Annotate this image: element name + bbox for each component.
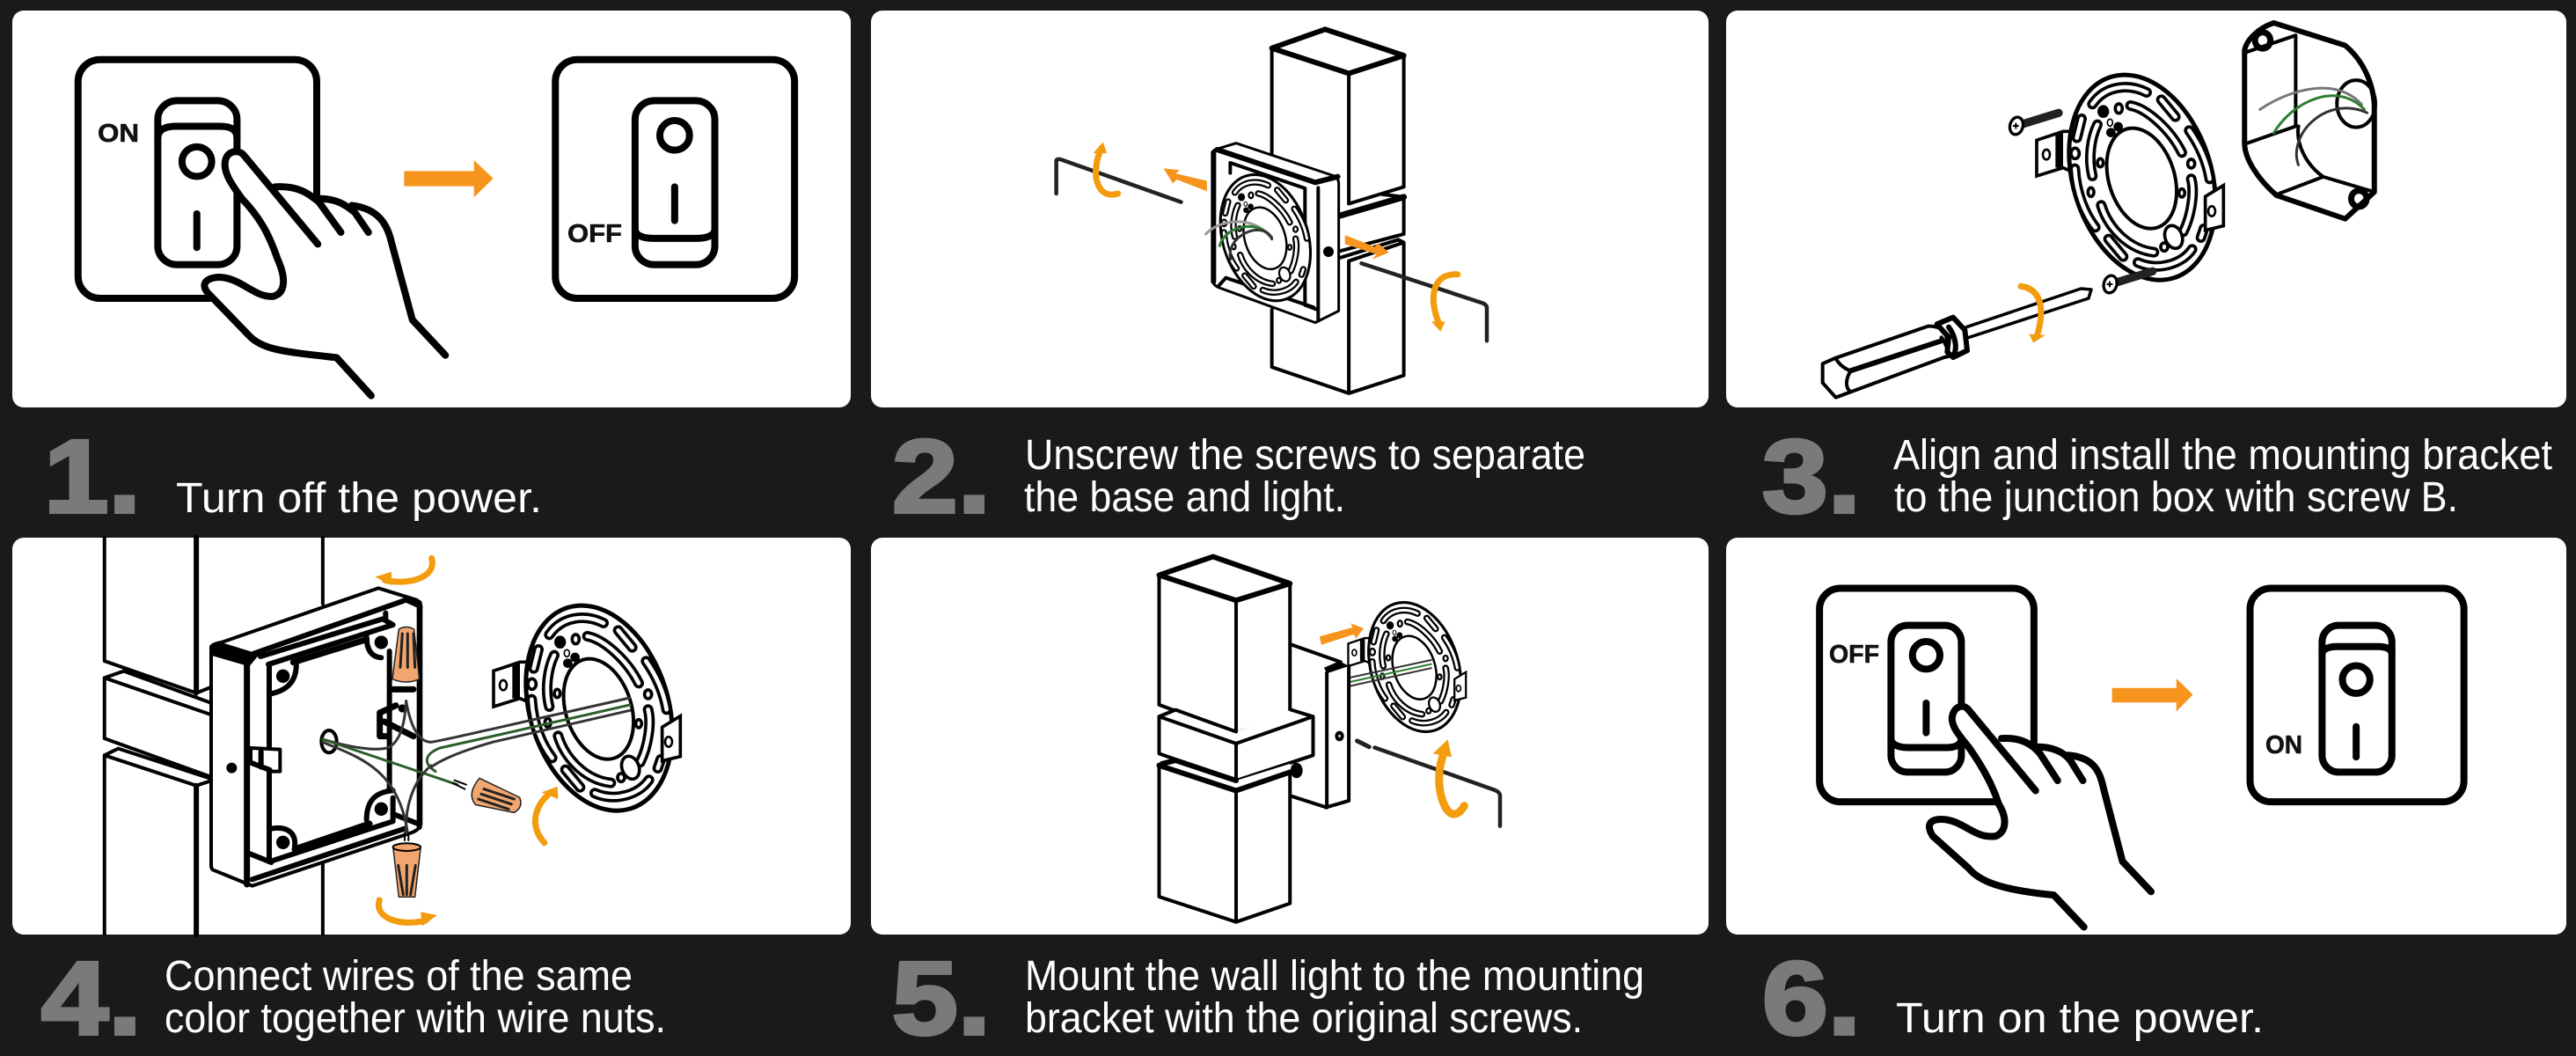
step 2 number: 2. (892, 419, 991, 535)
switch illustration, on to off (78, 60, 794, 396)
label: OFF: OFF (567, 220, 622, 248)
switch illustration, off to on (1819, 588, 2464, 927)
panel 5: mount the wall light (871, 538, 1709, 935)
mounting bracket (1205, 163, 1326, 312)
junction box (2244, 23, 2375, 219)
step 1 number: 1. (44, 419, 141, 535)
light body and hex keys (1057, 29, 1487, 393)
side wire nut and orange arrows (375, 558, 558, 926)
panel 2: unscrew the base (871, 11, 1709, 407)
step 3 caption line two: to the junction box with screw B. (1894, 474, 2458, 521)
light base plate (1212, 143, 1339, 323)
lower screw (2102, 271, 2153, 295)
mounting bracket (2037, 56, 2240, 298)
step 3 caption: Align and install the mounting bracket (1893, 432, 2552, 479)
wall lines of the light body (105, 538, 323, 935)
mounting bracket (1348, 590, 1476, 744)
step 1 caption: Turn off the power. (176, 475, 542, 522)
panel 4: connect wires (12, 538, 851, 935)
step 6 caption: Turn on the power. (1896, 995, 2264, 1042)
mounting bracket (494, 587, 697, 829)
step 5 caption: Mount the wall light to the mounting (1025, 953, 1644, 1000)
screwdriver (1823, 289, 2091, 398)
step 4 caption: Connect wires of the same (165, 953, 633, 1000)
panel 1: turn off the switch (12, 11, 851, 407)
step 2 caption: Unscrew the screws to separate (1025, 432, 1585, 479)
step 5 number: 5. (892, 941, 991, 1056)
step 3 number: 3. (1762, 419, 1861, 535)
upper screw (2008, 113, 2059, 136)
base screw hole (1323, 246, 1334, 257)
label: ON: ON (98, 120, 139, 148)
step 4 number: 4. (41, 941, 142, 1056)
light base with bosses, wires and wire nuts (211, 588, 630, 897)
step 6 number: 6. (1762, 941, 1861, 1056)
label: OFF: OFF (1829, 641, 1879, 669)
wall light, arrows, screw and hex key (1160, 557, 1500, 922)
wires and arrows (1093, 142, 1458, 332)
step 5 caption line two: bracket with the original screws. (1025, 995, 1583, 1042)
panel 3: install the mounting bracket (1726, 11, 2566, 407)
rotation arrow around the screwdriver (2021, 286, 2045, 343)
step 4 caption line two: color together with wire nuts. (165, 995, 666, 1042)
label: ON: ON (2265, 731, 2302, 759)
panel 6: turn on the switch (1726, 538, 2566, 935)
step 2 caption line two: the base and light. (1024, 474, 1345, 521)
